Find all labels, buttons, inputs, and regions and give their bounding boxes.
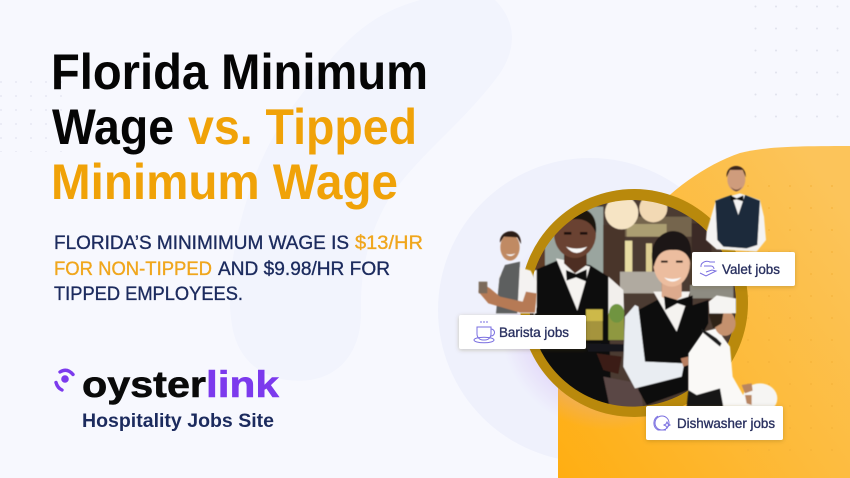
photo collage	[478, 166, 777, 430]
subtitle text: FOR NON-TIPPED	[54, 258, 212, 280]
title: vs. Tipped	[188, 99, 417, 155]
label: dishwasher jobs	[646, 406, 783, 440]
waiter	[532, 260, 612, 408]
subtitle text: AND $9.98/HR FOR	[218, 258, 390, 280]
background dots left	[0, 80, 62, 152]
barista person	[478, 231, 537, 313]
gold ring	[520, 189, 748, 417]
label: dishwasher jobs: Dishwasher jobs	[677, 415, 775, 431]
photo background	[535, 250, 546, 270]
tray and drinks	[586, 309, 603, 340]
subtitle text: $13/HR	[355, 232, 423, 254]
icon: coffee cup	[474, 321, 495, 343]
title: Florida Minimum	[51, 44, 428, 100]
logo wordmark: oyster	[82, 364, 206, 405]
waitress	[638, 297, 708, 405]
orange dots	[745, 180, 850, 465]
logo icon	[56, 370, 73, 390]
subtitle text	[54, 232, 423, 305]
background circle	[438, 158, 742, 462]
title: Wage	[52, 99, 174, 155]
circular photo	[530, 200, 736, 407]
icon: valet hand and key	[700, 261, 716, 276]
valet person	[706, 166, 766, 252]
label: barista jobs: Barista jobs	[499, 324, 569, 340]
subtitle text: FLORIDA’S MINIMIMUM WAGE IS	[54, 232, 349, 254]
title	[51, 44, 428, 210]
title: Minimum Wage	[51, 154, 398, 210]
subtitle text: TIPPED EMPLOYEES.	[54, 283, 243, 305]
label: barista jobs	[459, 315, 586, 349]
dishwasher person	[687, 295, 777, 413]
label: valet jobs: Valet jobs	[722, 261, 780, 277]
glow behind circle	[500, 217, 713, 430]
logo tagline: Hospitality Jobs Site	[82, 411, 274, 432]
icon: dish with sparkle	[654, 416, 670, 430]
logo	[56, 364, 279, 432]
background blob	[230, 0, 512, 381]
background dots right	[752, 4, 850, 119]
orange shape	[558, 146, 850, 478]
logo: link	[206, 364, 279, 405]
label: valet jobs	[692, 252, 795, 286]
